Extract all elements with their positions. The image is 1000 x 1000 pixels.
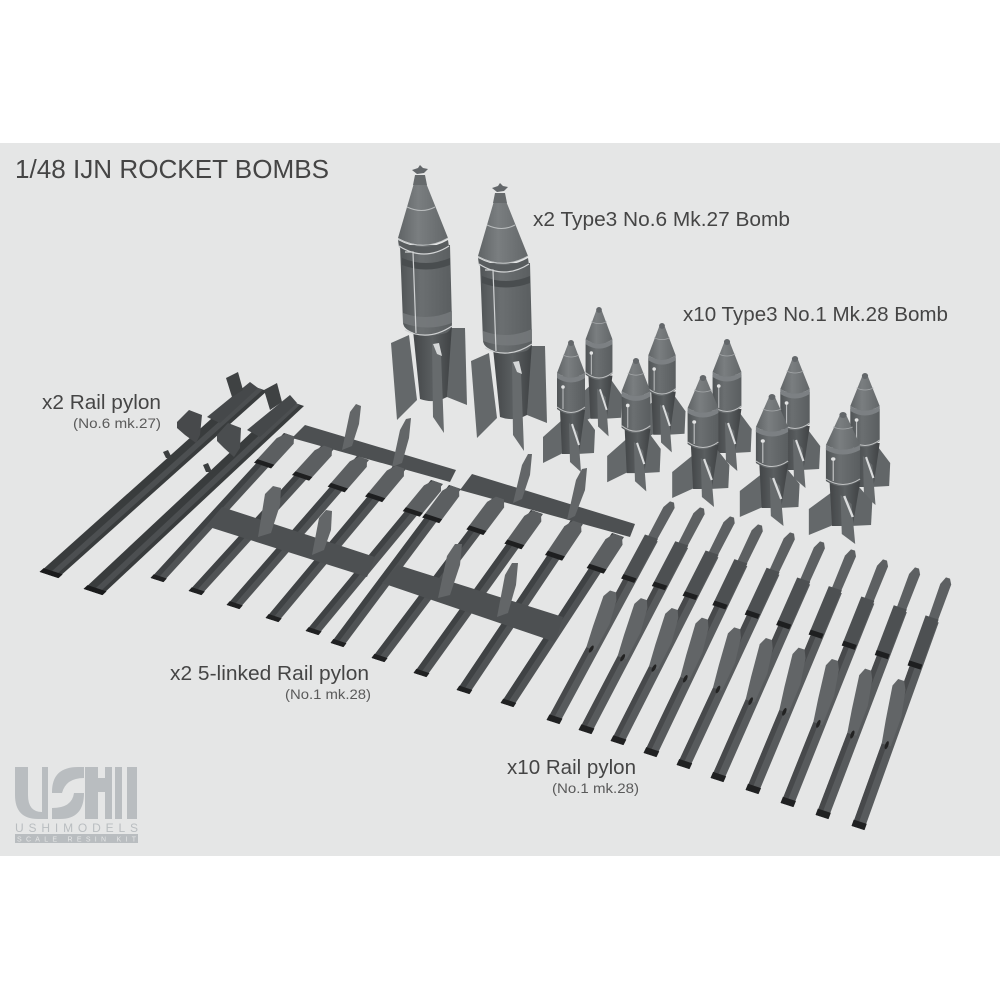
linked pylon set 2	[330, 454, 635, 707]
label: big bombs: x2 Type3 No.6 Mk.27 Bomb	[533, 209, 790, 231]
label: x10 rail pylon	[507, 757, 639, 796]
title: 1/48 IJN ROCKET BOMBS	[15, 154, 329, 184]
logo: Ushi Models	[15, 767, 138, 844]
group: x2 Type3 No.6 Mk.27 bombs	[391, 165, 547, 451]
label: x2 5-linked rail pylon	[170, 663, 371, 702]
group: x10 Type3 No.1 Mk.28 bombs	[543, 307, 890, 544]
group: x2 rail pylon No.6	[40, 372, 304, 595]
label: x2 rail pylon	[42, 392, 161, 431]
group: x2 5-linked rail pylons	[150, 404, 635, 707]
label: small bombs: x10 Type3 No.1 Mk.28 Bomb	[683, 304, 948, 326]
logo: Ushi Models: SCALE RESIN KIT	[17, 836, 137, 844]
logo: Ushi Models: USHIMODELS	[15, 821, 138, 835]
label: x2 rail pylon: (No.6 mk.27)	[73, 415, 161, 431]
group: x10 rail pylons	[538, 497, 954, 830]
label: x2 5-linked rail pylon: (No.1 mk.28)	[285, 686, 371, 702]
linked pylon set 1	[150, 404, 456, 635]
grey backdrop panel	[0, 143, 1000, 856]
label: x10 rail pylon: x10 Rail pylon	[507, 757, 636, 779]
label: x2 rail pylon: x2 Rail pylon	[42, 392, 161, 414]
label: x2 5-linked rail pylon: x2 5-linked Rail pylon	[170, 663, 369, 685]
label: x10 rail pylon: (No.1 mk.28)	[552, 780, 639, 796]
